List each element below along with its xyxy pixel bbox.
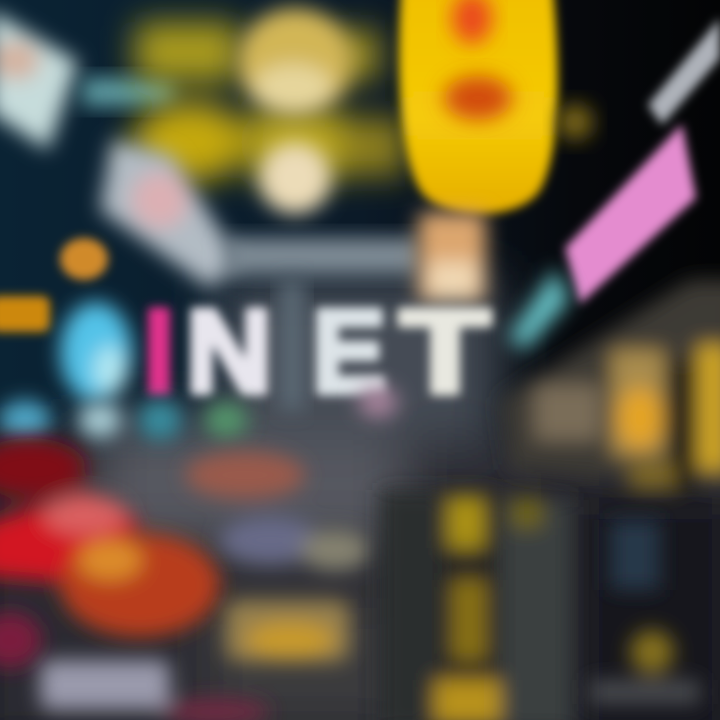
background: night sky bbox=[0, 0, 720, 460]
background: street bbox=[0, 280, 720, 720]
shops: lower right details bbox=[590, 520, 700, 704]
banner: teal flag bbox=[508, 268, 570, 350]
blobs: orange dot and bar bbox=[0, 238, 108, 332]
banner: white pole bbox=[648, 18, 720, 125]
banner: pink flag bbox=[565, 124, 696, 304]
sign: grey band above letters bbox=[225, 238, 420, 274]
word: INET letters: I bbox=[144, 286, 174, 418]
stall: market goods bbox=[40, 451, 369, 720]
sign: top left pale board bbox=[0, 10, 78, 150]
sign: central pale round bbox=[237, 8, 353, 214]
sign: large yellow lantern bbox=[399, 0, 593, 214]
word: INET letters: E bbox=[312, 286, 386, 418]
row: small colored lights bbox=[0, 386, 398, 440]
shops: right storefronts bbox=[500, 280, 720, 490]
sign: pale diagonal board bbox=[100, 140, 240, 288]
lane: road yellow markings bbox=[380, 490, 572, 720]
pole: central grey column bbox=[280, 280, 304, 410]
sign: peach column bbox=[418, 212, 486, 302]
blob: sky blue letter bbox=[60, 302, 132, 402]
word: INET letters: N bbox=[186, 286, 272, 418]
word: INET letters: T bbox=[400, 286, 490, 418]
signs: olive yellow cluster bbox=[132, 22, 405, 182]
sign: teal band bbox=[82, 78, 174, 106]
stall: red awning bbox=[0, 438, 220, 668]
word: INET letters bbox=[144, 286, 490, 418]
